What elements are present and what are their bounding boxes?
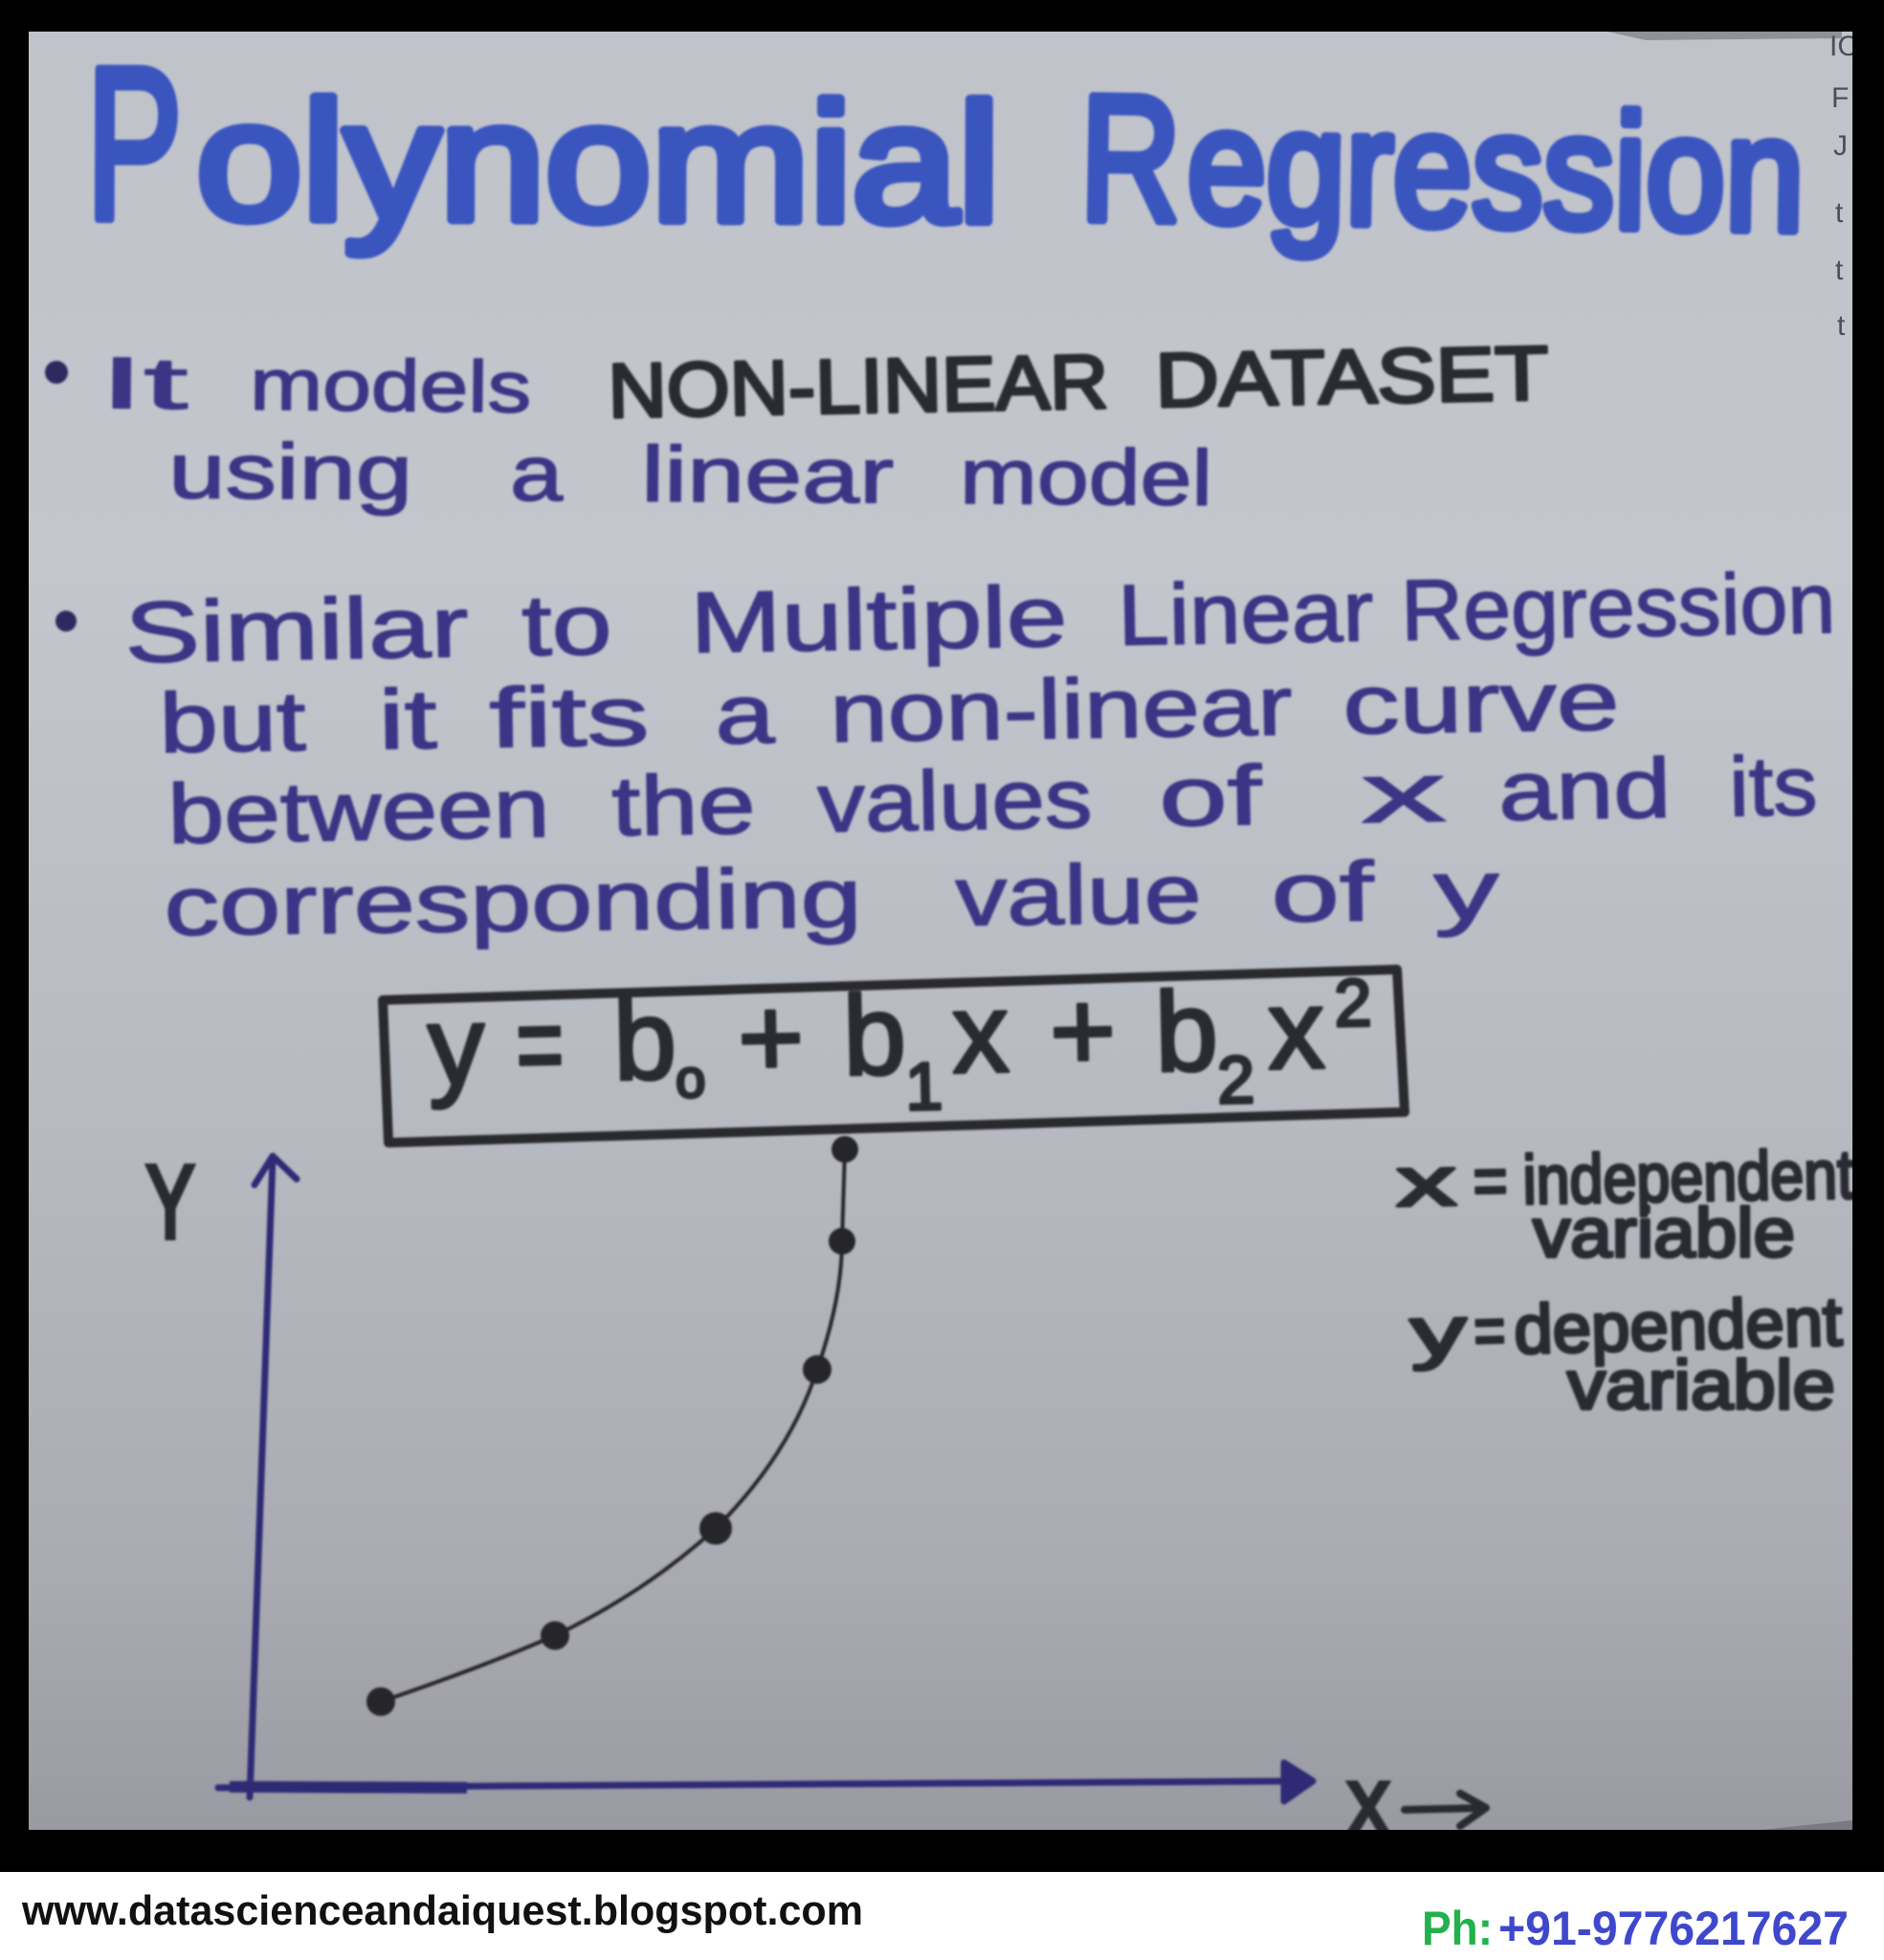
line: it models: It	[100, 343, 188, 425]
line: using a linear model: using	[168, 428, 413, 517]
equation: x	[1267, 966, 1325, 1094]
title word: polynomial: P	[86, 22, 183, 264]
equation: x	[951, 969, 1009, 1098]
y definition: =	[1473, 1292, 1506, 1370]
equation: b	[842, 972, 907, 1100]
footer background	[0, 1872, 1884, 1960]
line: using a linear model: a	[510, 430, 564, 518]
bullet dot	[45, 361, 68, 384]
x axis thick segment	[230, 1787, 467, 1788]
equation: b	[1154, 969, 1219, 1096]
show-through print at right edge: t	[1835, 255, 1844, 286]
title word: regression: egression	[1186, 75, 1806, 266]
equation	[425, 976, 1372, 1113]
footer band	[0, 1872, 1884, 1960]
line: but it fits a curve: but	[159, 674, 306, 770]
line: non-linear dataset	[610, 343, 1550, 421]
line: it models: models	[250, 345, 532, 429]
line: between the values: values	[817, 750, 1093, 850]
title	[93, 63, 1801, 263]
line: between the values: between	[167, 760, 550, 861]
legend: variable definitions	[1396, 1137, 1854, 1424]
bullet dot	[55, 611, 77, 632]
equation: =	[515, 981, 565, 1108]
y axis arrow	[250, 1156, 297, 1797]
equation: 1	[904, 1049, 943, 1125]
line: corresponding value: of	[1271, 844, 1375, 940]
line: similar to multiple linear regression: to	[521, 577, 612, 675]
show-through print at right edge: t	[1837, 310, 1846, 342]
line: non-linear dataset: NON-LINEAR	[608, 339, 1109, 434]
fitted curve	[381, 1149, 845, 1702]
title word: polynomial: olynomial	[196, 67, 1001, 257]
formula box	[383, 962, 1405, 1143]
equation: y	[427, 983, 486, 1110]
x axis arrow	[218, 1763, 1313, 1801]
line: corresponding value: value	[955, 846, 1202, 944]
equation: 2	[1216, 1042, 1255, 1118]
equation: 2	[1334, 965, 1372, 1040]
line: using a linear model	[172, 439, 1209, 518]
equation: o	[675, 1048, 706, 1109]
x definition: =	[1473, 1143, 1508, 1220]
y definition: y	[1409, 1294, 1467, 1371]
website url: www.datascienceandaiquest.blogspot.com	[21, 1887, 863, 1934]
line: corresponding value: corresponding	[164, 850, 862, 953]
bullet 1 text	[45, 330, 1549, 523]
phone number: +91-9776217627	[1498, 1902, 1849, 1955]
line: it models	[111, 356, 530, 415]
y definition: dependent	[1513, 1283, 1843, 1369]
phone label: Ph:	[1422, 1902, 1493, 1955]
line: but it fits a curve: it	[378, 671, 437, 767]
show-through print at right edge	[1831, 35, 1852, 335]
line: using a linear model: linear	[641, 431, 894, 520]
x direction arrow	[1405, 1793, 1486, 1826]
line: corresponding value: y	[1433, 842, 1499, 938]
x definition: x	[1396, 1144, 1456, 1221]
line: but it fits a curve: fits	[489, 668, 650, 766]
x axis label: X	[1347, 1769, 1389, 1850]
line: between the values	[171, 752, 1817, 846]
line: but it fits a curve	[163, 674, 1617, 755]
equation: b	[612, 977, 677, 1104]
title word: regression: R	[1078, 59, 1183, 259]
x definition	[1396, 1137, 1854, 1221]
y axis label: Y	[146, 1144, 194, 1259]
line: between the values: its	[1728, 738, 1818, 835]
chart: polynomial curve	[146, 1136, 1486, 1850]
line: similar to multiple linear regression: Similar	[124, 580, 469, 681]
show-through print at right edge: IC	[1829, 31, 1858, 62]
line: between the values: x	[1360, 745, 1447, 840]
show-through print at right edge: t	[1835, 197, 1844, 229]
line: similar to multiple linear regression	[128, 569, 1833, 668]
line: between the values: and	[1497, 741, 1672, 838]
line: but it fits a curve: a	[715, 666, 775, 762]
line: non-linear dataset: DATASET	[1155, 330, 1549, 423]
line: between the values: the	[611, 756, 756, 854]
y definition second line: variable	[1567, 1348, 1835, 1424]
line: similar to multiple linear regression: Regression	[1400, 556, 1836, 659]
page corner shadows	[1607, 32, 1852, 1830]
show-through print at right edge: J	[1833, 130, 1848, 162]
line: similar to multiple linear regression: Linear	[1117, 564, 1374, 664]
line: corresponding value	[166, 858, 1500, 951]
box outline	[383, 969, 1405, 1143]
equation: +	[737, 974, 805, 1102]
line: between the values: of	[1158, 747, 1263, 844]
data points	[366, 1136, 858, 1716]
show-through print at right edge: F	[1831, 82, 1849, 114]
line: but it fits a curve: curve	[1342, 653, 1620, 752]
x definition second line: variable	[1533, 1195, 1795, 1272]
line: but it fits a curve: non-linear	[830, 657, 1293, 760]
bullet 2 text	[55, 556, 1836, 953]
line: similar to multiple linear regression: Multiple	[690, 569, 1068, 672]
line: using a linear model: model	[960, 434, 1212, 523]
equation: +	[1049, 968, 1117, 1095]
